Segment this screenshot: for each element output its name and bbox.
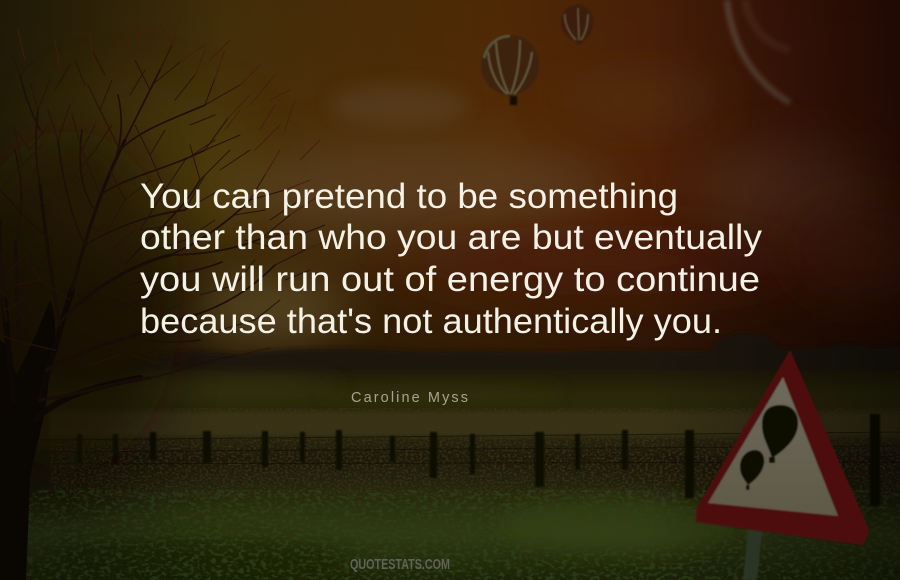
- road sign: [697, 352, 868, 580]
- quote text: [140, 177, 763, 341]
- sign white face: [708, 377, 838, 516]
- quote text: other than who you are but eventually: [140, 218, 763, 257]
- grass texture: [0, 490, 900, 580]
- hot air balloon: large: [481, 35, 539, 105]
- vineyard texture: [50, 408, 900, 498]
- moon: [727, 0, 790, 103]
- quote text: you will run out of energy to continue: [140, 260, 760, 299]
- sign large balloon: [762, 405, 798, 463]
- quote text: because that's not authentically you.: [140, 302, 722, 341]
- tree trunk: [0, 300, 55, 580]
- canopy shade: [0, 130, 180, 470]
- quote text: You can pretend to be something: [140, 177, 678, 216]
- background: sunset sky: [0, 0, 900, 380]
- sign post: [743, 530, 762, 580]
- sign red border: [697, 352, 868, 544]
- hot air balloon: small: [561, 5, 593, 45]
- watermark: QUOTESTATS.COM: [350, 556, 450, 573]
- author name: Caroline Myss: [351, 390, 468, 406]
- tree silhouette: [0, 18, 330, 580]
- sign small balloon: [740, 450, 764, 490]
- distant tree line: [130, 333, 900, 391]
